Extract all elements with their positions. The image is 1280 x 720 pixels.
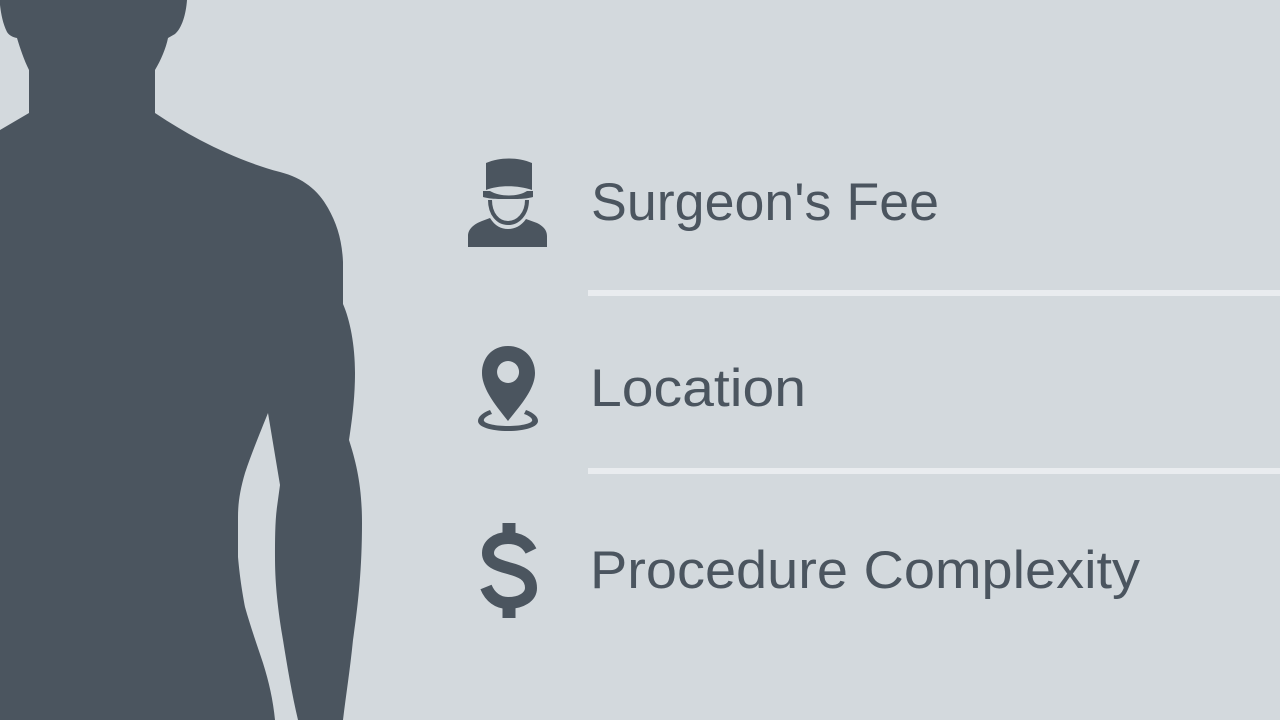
body silhouette xyxy=(0,0,362,720)
surgeon face outline xyxy=(490,200,527,223)
label: surgeon's fee: Surgeon's Fee xyxy=(591,173,939,232)
icon: dollar sign xyxy=(486,523,531,618)
label: location: Location xyxy=(590,359,806,418)
surgeon shoulders xyxy=(468,218,547,247)
icon: location pin xyxy=(478,346,538,431)
surgeon cap xyxy=(486,158,532,190)
label: procedure complexity: Procedure Complexity xyxy=(590,541,1141,600)
divider xyxy=(588,468,1280,474)
divider xyxy=(588,290,1280,296)
surgeon brim xyxy=(483,191,533,199)
icon: surgeon xyxy=(468,158,547,247)
